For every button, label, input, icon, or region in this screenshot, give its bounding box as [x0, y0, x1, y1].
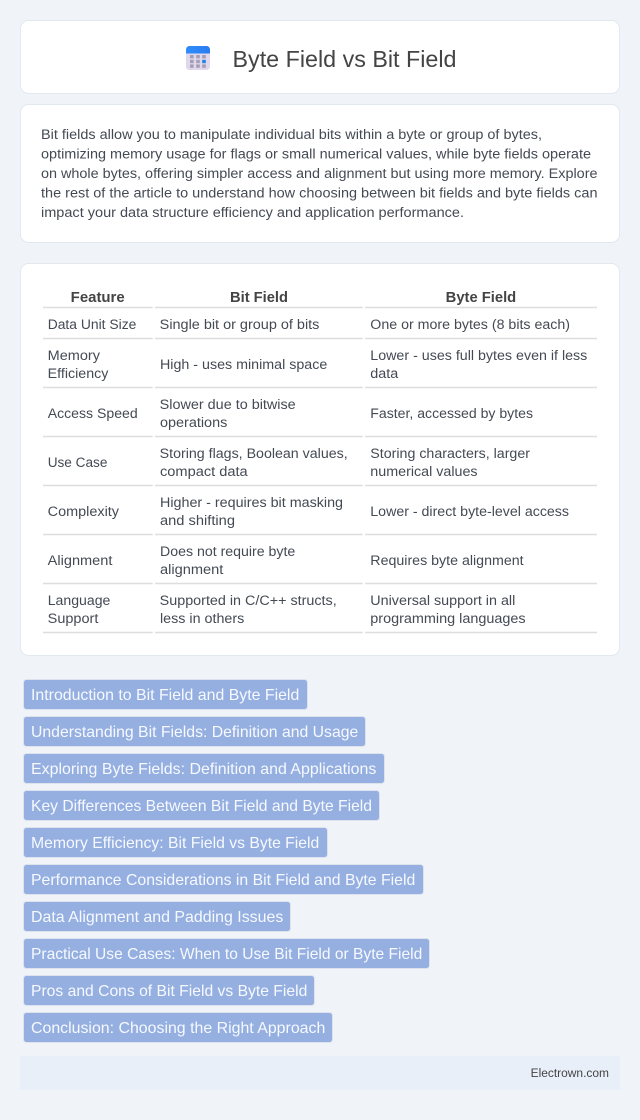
table header row: Byte Field [446, 290, 516, 306]
panel: comparison table [20, 264, 620, 656]
topic pill 6 [24, 864, 424, 894]
topic pill 7 [24, 902, 290, 932]
table row: memory efficiency [48, 348, 587, 382]
table row: alignment [48, 544, 524, 578]
table row: use case: numerical values [370, 464, 478, 480]
table row: memory efficiency: High - uses minimal space [160, 357, 327, 373]
footer: Electrown.com [531, 1066, 609, 1080]
table row: language support: programming languages [370, 611, 526, 627]
topic pill 8: Practical Use Cases: When to Use Bit Field or Byte Field [31, 946, 422, 963]
table row: access speed: Access Speed [48, 406, 138, 422]
topic pill 5: Memory Efficiency: Bit Field vs Byte Field [31, 835, 319, 852]
topic pill 6: Performance Considerations in Bit Field and Byte Field [31, 872, 415, 889]
table row: data unit size: One or more bytes (8 bits each) [370, 317, 570, 333]
topic pill 5 [24, 828, 328, 858]
topic pill 2 [24, 716, 366, 746]
text block: intro paragraph: optimizing memory usage for flags or small numerical values, while byte fields operate [41, 146, 591, 162]
table row: complexity: Complexity [48, 504, 120, 520]
title: Byte Field vs Bit Field [232, 46, 456, 72]
panel: topic list [24, 680, 430, 1042]
topic pill 9 [24, 976, 314, 1006]
text block: intro paragraph: Bit fields allow you to manipulate individual bits within a byte or group of bytes, [41, 127, 542, 143]
table row: access speed [48, 397, 533, 431]
table row: alignment: Requires byte alignment [370, 553, 524, 569]
topic pill 8 [24, 938, 430, 968]
table row: memory efficiency: Memory [48, 348, 101, 364]
table row: access speed: Faster, accessed by bytes [370, 406, 533, 422]
table row: use case: Storing characters, larger [370, 446, 530, 462]
table row: use case: Use Case [48, 455, 108, 471]
table row: language support: Support [48, 611, 98, 627]
topic pill 2: Understanding Bit Fields: Definition and Usage [31, 724, 358, 741]
table row: use case [48, 446, 530, 480]
table row: alignment: Alignment [48, 553, 112, 569]
table row: access speed: Slower due to bitwise [160, 397, 296, 413]
table row: language support [48, 593, 526, 627]
topic pill 10 [24, 1012, 332, 1042]
text block: intro paragraph: the rest of the article to understand how choosing between bit fields and byte fields can [41, 186, 598, 202]
table row: memory efficiency: Lower - uses full bytes even if less [370, 348, 587, 364]
table header row [71, 290, 516, 306]
topic pill 10: Conclusion: Choosing the Right Approach [31, 1020, 325, 1037]
table row: complexity [48, 495, 569, 529]
topic pill 3: Exploring Byte Fields: Definition and Applications [31, 761, 376, 778]
panel: introduction [20, 104, 620, 242]
table row: alignment: Does not require byte [160, 544, 295, 560]
table header row: Bit Field [230, 290, 288, 306]
topic pill 1: Introduction to Bit Field and Byte Field [31, 687, 299, 704]
table row: language support: Supported in C/C++ structs, [160, 593, 337, 609]
footer [20, 1056, 620, 1090]
icon: calendar grid [186, 46, 210, 70]
text block: intro paragraph [41, 127, 598, 221]
table row: access speed: operations [160, 415, 227, 431]
topic pill 7: Data Alignment and Padding Issues [31, 909, 283, 926]
text block: intro paragraph: on whole bytes, offering simpler access and alignment but using more memory. Explore [41, 166, 598, 182]
table row: use case: Storing flags, Boolean values, [160, 446, 348, 462]
table row: data unit size: Data Unit Size [48, 317, 137, 333]
topic pill 1 [24, 680, 308, 710]
topic pill 4: Key Differences Between Bit Field and Byte Field [31, 798, 372, 815]
text block: intro paragraph: impact your data structure efficiency and application performance. [41, 205, 464, 221]
table row: complexity: and shifting [160, 513, 235, 529]
table row: memory efficiency: data [370, 366, 398, 382]
table row: alignment: alignment [160, 562, 223, 578]
table row: complexity: Lower - direct byte-level access [370, 504, 569, 520]
table row: language support: less in others [160, 611, 244, 627]
topic pill 9: Pros and Cons of Bit Field vs Byte Field [31, 983, 307, 1000]
topic pill 4 [24, 790, 380, 820]
table row: memory efficiency: Efficiency [48, 366, 109, 382]
table row: data unit size [48, 317, 570, 333]
table row: data unit size: Single bit or group of bits [160, 317, 319, 333]
table row: complexity: Higher - requires bit masking [160, 495, 343, 511]
table row: language support: Language [48, 593, 111, 609]
topic pill 3 [24, 754, 384, 784]
table header row: Feature [71, 290, 125, 306]
panel: header [20, 20, 620, 94]
table row: language support: Universal support in all [370, 593, 515, 609]
table row: use case: compact data [160, 464, 248, 480]
